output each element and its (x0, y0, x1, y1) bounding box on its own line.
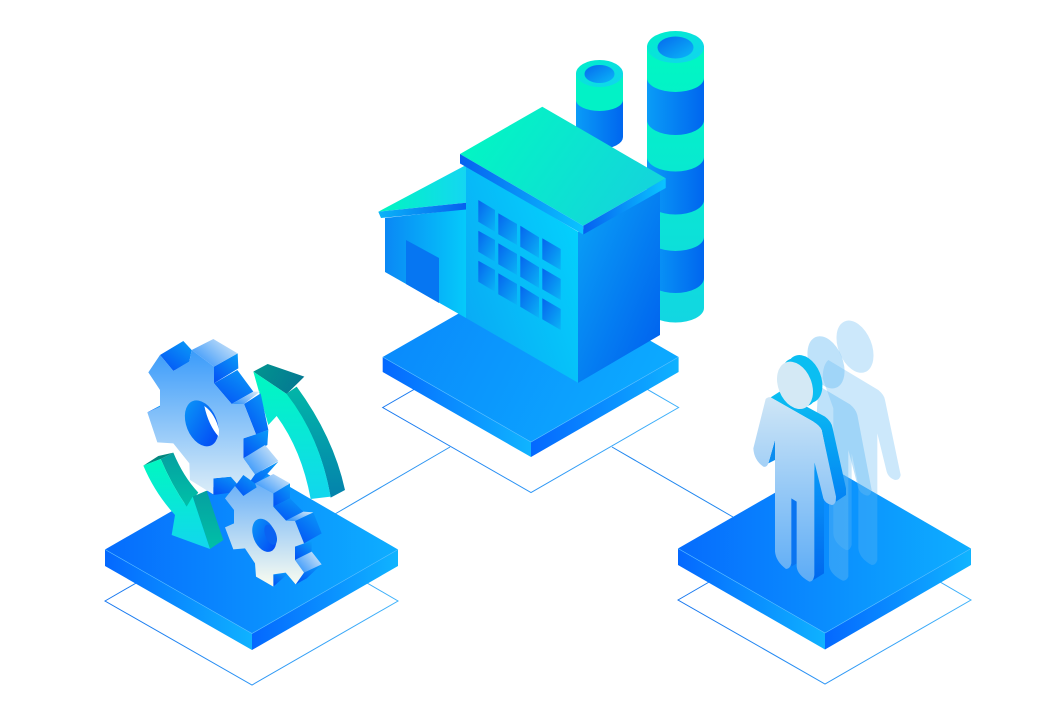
platform left side (383, 357, 531, 457)
chimney band 2 (647, 110, 704, 172)
platform top (383, 272, 679, 442)
small gear thin light tooth (286, 512, 313, 521)
gear light tooth (243, 445, 278, 474)
small chimney top band (576, 73, 623, 111)
main roof top (460, 107, 666, 226)
front person arm side (768, 440, 775, 463)
platform outline shadow (105, 516, 398, 685)
down arrow head side (193, 491, 223, 549)
gear top light face (192, 339, 238, 367)
front person shoulder side (771, 391, 846, 502)
gears and arrows (143, 339, 345, 587)
small gear top light face (255, 474, 290, 493)
window row 3 (478, 261, 561, 330)
small gear hole inner (262, 523, 280, 547)
annex roof edge (378, 203, 466, 218)
large chimney (647, 31, 704, 322)
gear teeth sides (147, 341, 278, 495)
small gear front face (225, 483, 304, 587)
middle person (800, 331, 872, 581)
up arrow (253, 364, 345, 499)
down arrow front (143, 459, 210, 549)
chimney opening (658, 36, 694, 58)
small chimney (576, 60, 623, 149)
down arrow shaft side (161, 453, 198, 507)
chimney band 1 (647, 70, 704, 135)
gear light tooth small (232, 392, 260, 404)
large gear (147, 339, 278, 495)
front person head side (775, 350, 829, 412)
down arrow (143, 453, 223, 549)
chimney band 5 (647, 230, 704, 293)
front person head (770, 356, 820, 414)
chimney band 3 (647, 150, 704, 214)
building left wall (466, 165, 578, 383)
window row 2 (478, 231, 561, 300)
platform left side (678, 548, 825, 650)
factory building (378, 107, 666, 383)
platform left side (105, 550, 252, 650)
up arrow front (253, 372, 331, 499)
small gear teeth sides (235, 475, 322, 587)
small gear light tooth (295, 552, 322, 573)
annex door (406, 240, 439, 303)
annex roof (378, 165, 466, 212)
back person head (829, 315, 881, 378)
connector line: factory to people (612, 447, 733, 517)
front person between legs (791, 498, 797, 567)
annex wall (385, 209, 466, 318)
roof front edge (460, 154, 583, 234)
front person (753, 350, 846, 582)
platform right side (825, 548, 971, 650)
back person body (823, 360, 901, 565)
platform top (105, 465, 398, 634)
back person (823, 315, 901, 565)
people figures (753, 315, 901, 582)
connector line: gears to factory (335, 447, 450, 514)
chimney band 4 (647, 190, 704, 251)
small chimney blue band (576, 90, 623, 149)
middle person body (817, 386, 872, 581)
large gear hole (178, 395, 225, 451)
factory platform (383, 272, 679, 492)
platform edge highlight (105, 550, 398, 634)
roof side edge (583, 178, 666, 234)
large gear hole opening (204, 406, 219, 437)
small chimney cap (576, 60, 623, 87)
platform edge highlight (678, 548, 971, 633)
windows grid (478, 200, 561, 330)
chimney cap (647, 31, 704, 63)
chimney top band (647, 46, 704, 92)
front person body (753, 397, 836, 582)
front person leg side (813, 462, 824, 580)
platform outline shadow (383, 322, 679, 492)
up arrow head side (253, 364, 304, 394)
platform top (678, 464, 971, 633)
people platform (678, 464, 971, 684)
small gear (225, 474, 322, 587)
gears platform (105, 465, 398, 685)
large gear front face (147, 350, 256, 494)
platform outline shadow (678, 515, 971, 684)
platform right side (531, 357, 679, 457)
middle person head (800, 331, 852, 394)
small chimney opening (584, 65, 614, 83)
chimney band 6 (647, 270, 704, 322)
up arrow shaft side (286, 387, 345, 498)
building right wall (578, 190, 660, 383)
small gear hole (248, 515, 281, 556)
platform right side (252, 550, 398, 650)
platform edge highlight (383, 357, 679, 442)
down arrow top (143, 453, 173, 466)
window row 1 (478, 200, 561, 270)
